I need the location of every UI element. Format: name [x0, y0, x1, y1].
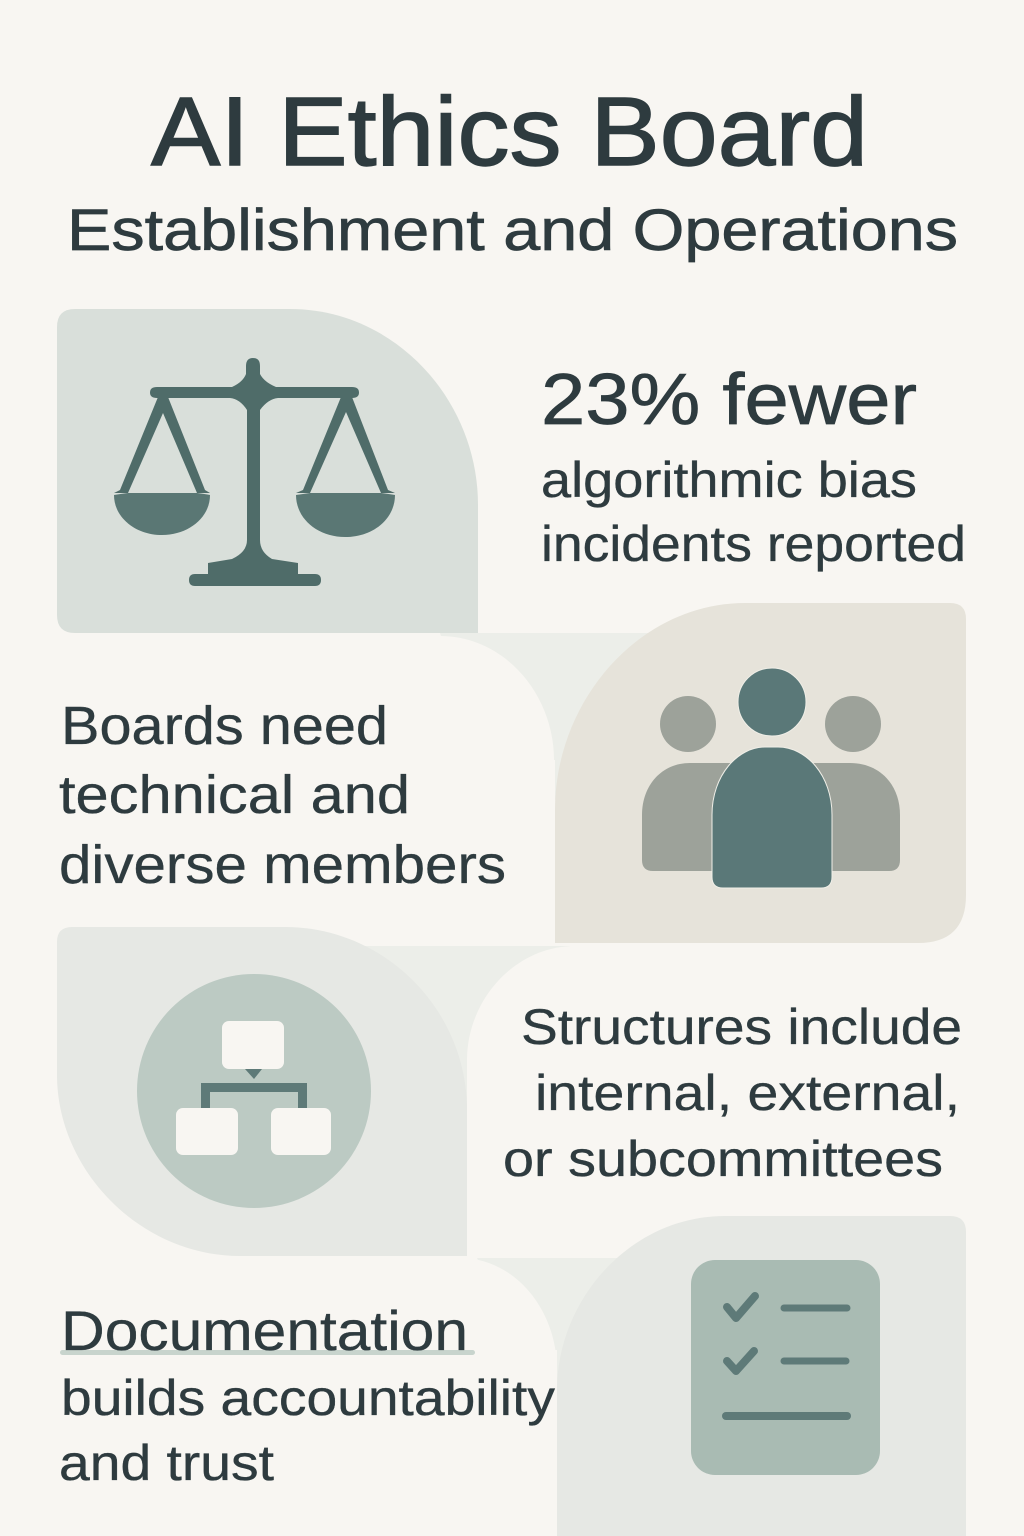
- panel: structure background: [57, 927, 467, 1256]
- text: bias statistic: algorithmic bias: [541, 452, 917, 508]
- text: board members: diverse members: [59, 835, 506, 895]
- icon: checklist document: [691, 1260, 880, 1475]
- connector band 1: [440, 633, 660, 800]
- text: structures: or subcommittees: [503, 1131, 943, 1187]
- panel: team background: [555, 603, 966, 943]
- title: AI Ethics Board: [151, 77, 868, 186]
- text: board members: Boards need: [61, 696, 388, 756]
- text: bias statistic: incidents reported: [541, 516, 966, 572]
- text: structures: [503, 999, 962, 1187]
- subtitle: Establishment and Operations: [67, 198, 958, 263]
- icon: balance scales: [114, 358, 395, 586]
- text: documentation: and trust: [59, 1435, 274, 1491]
- panel: structure text background: [467, 946, 1024, 1258]
- text: board members: [59, 696, 506, 895]
- text: documentation: [59, 1299, 555, 1491]
- text: bias statistic: [541, 360, 966, 572]
- icon: three people: [642, 668, 900, 888]
- text: documentation: builds accountability: [61, 1370, 555, 1426]
- connector band 3: [477, 1258, 650, 1400]
- text: board members: technical and: [59, 765, 410, 825]
- panel: scales background: [57, 309, 478, 633]
- title: [67, 77, 958, 263]
- text: bias statistic: 23% fewer: [541, 360, 917, 440]
- panel: documentation text background: [0, 1258, 557, 1536]
- underline: [60, 1350, 475, 1355]
- text: structures: internal, external,: [535, 1065, 960, 1121]
- panel: board text background: [0, 636, 554, 945]
- connector band 2: [350, 946, 570, 1256]
- panel: documentation background: [557, 1216, 966, 1536]
- icon: org chart: [137, 974, 371, 1208]
- text: documentation: Documentation: [61, 1299, 468, 1362]
- text: structures: Structures include: [521, 999, 962, 1055]
